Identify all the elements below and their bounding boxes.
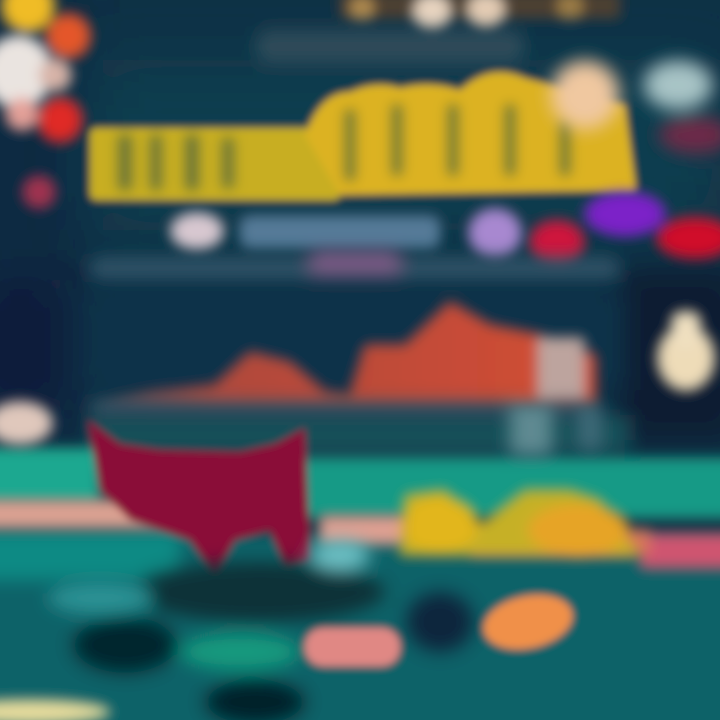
header grey line	[255, 30, 525, 64]
title: yellow block	[90, 72, 636, 200]
red area chart	[90, 302, 595, 405]
secondary text line	[90, 250, 620, 278]
orange pill	[479, 587, 577, 657]
top-left circle cluster	[0, 0, 90, 142]
highlights right of title	[551, 61, 720, 153]
pink pill	[305, 628, 400, 666]
small red marker	[23, 176, 55, 208]
pale bottom-left strip	[0, 700, 110, 720]
chart base and pillars	[90, 402, 602, 455]
dark bottom shapes	[48, 540, 474, 720]
title gaps	[118, 105, 570, 190]
white side blob	[0, 402, 52, 444]
icon: light bulb	[658, 312, 714, 390]
yellow bar cluster	[400, 490, 640, 556]
top strip of lights	[340, 0, 620, 30]
crimson shape	[88, 420, 310, 575]
subtitle row	[171, 192, 720, 263]
pink horizontal bands	[0, 500, 720, 568]
